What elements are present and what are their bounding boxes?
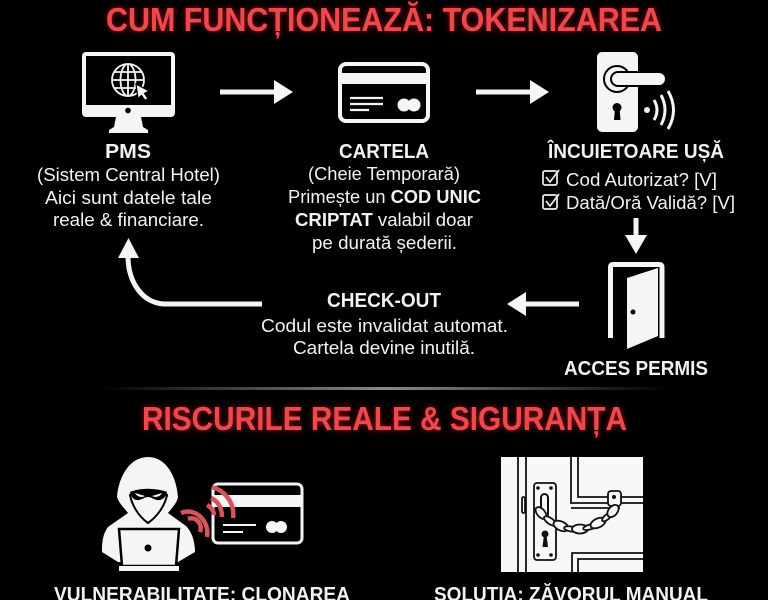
text block: PMS: Aici sunt datele tale <box>45 188 212 208</box>
arrow: PMS to card <box>220 80 293 104</box>
icon: smart door lock <box>597 52 674 132</box>
title: how it works: CUM FUNCȚIONEAZĂ: TOKENIZAREA <box>106 1 662 38</box>
text block: card: (Cheie Temporară) <box>308 164 460 184</box>
text block: check-out: CHECK-OUT <box>327 290 441 312</box>
title: risks: RISCURILE REALE & SIGURANȚA <box>142 400 627 437</box>
text block: card: pe durată șederii. <box>312 233 457 253</box>
text block: check-out: Cartela devine inutilă. <box>293 338 475 358</box>
text block: check-out: Codul este invalidat automat. <box>261 316 508 336</box>
text block: door lock checks: Dată/Oră Validă? [V] <box>566 193 735 213</box>
text block: PMS <box>37 141 220 230</box>
text block: door lock checks: Cod Autorizat? [V] <box>566 170 717 190</box>
panel: how tokenization works <box>37 1 735 380</box>
text block: card: CRIPTAT valabil doar <box>295 210 473 230</box>
text block: door lock checks <box>543 139 735 213</box>
icon: open door <box>610 264 662 349</box>
icon: door chain lock <box>501 457 643 572</box>
text block: PMS: PMS <box>105 141 151 163</box>
icon: PMS monitor with globe <box>82 52 175 133</box>
text block: access granted: ACCES PERMIS <box>564 358 708 380</box>
text block: PMS: (Sistem Central Hotel) <box>37 165 220 185</box>
text block: check-out <box>261 290 508 358</box>
arrow: check-out back to PMS <box>118 238 262 304</box>
text block: door lock checks: ÎNCUIETOARE UȘĂ <box>547 139 724 163</box>
icon: hacker cloning a card <box>102 457 302 571</box>
text block: PMS: reale & financiare. <box>53 210 204 230</box>
panel: real risks and safety <box>54 400 708 600</box>
arrow: lock to door <box>625 218 647 254</box>
icon: key card <box>340 64 428 121</box>
text block: card: Primește un COD UNIC <box>288 187 481 207</box>
arrow: card to door lock <box>476 80 549 104</box>
text block: card: CARTELA <box>339 141 429 163</box>
arrow: door to check-out <box>507 292 579 316</box>
text block: card <box>288 141 481 253</box>
